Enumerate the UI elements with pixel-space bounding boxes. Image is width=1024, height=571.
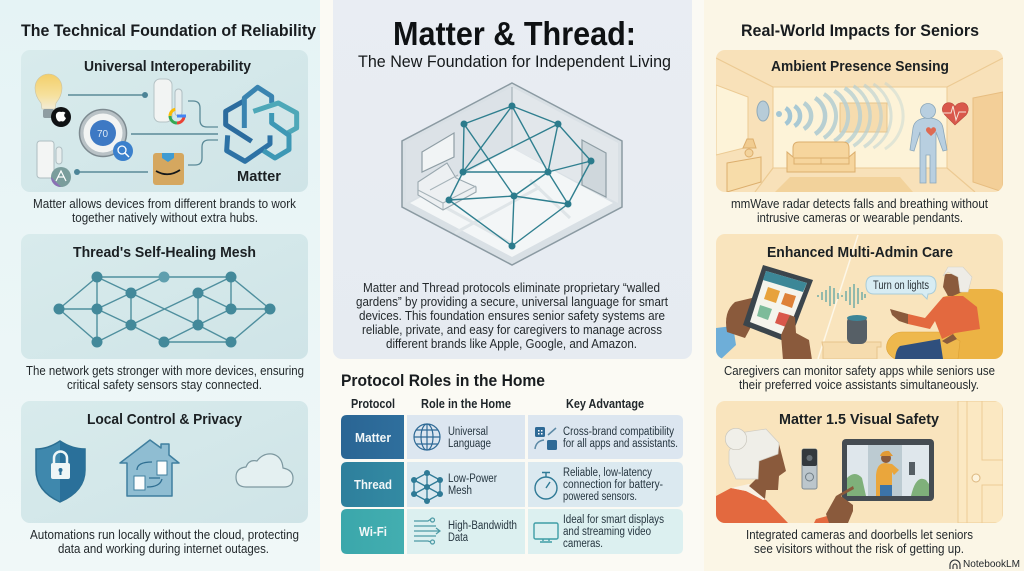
card: universal interoperability: Matter — [237, 168, 281, 185]
icon: house with local data — [120, 440, 179, 496]
row: wi-fi: Data — [448, 532, 468, 544]
row: wi-fi: Ideal for smart displays — [563, 514, 664, 526]
row: matter: Cross-brand compatibility — [563, 426, 674, 438]
row: thread: Mesh — [448, 485, 472, 497]
text: multi-admin caption: Caregivers can monitor safety apps while seniors use — [724, 364, 995, 378]
text: interoperability caption: together natively without extra hubs. — [72, 211, 258, 225]
text: visual safety caption: Integrated cameras and doorbells let seniors — [746, 528, 973, 542]
row: thread: Thread — [354, 477, 392, 492]
card: self-healing mesh: Thread's Self-Healing Mesh — [73, 244, 256, 261]
text: overview paragraph: devices. This foundation ensures senior safety systems are — [359, 309, 665, 323]
text: overview paragraph: different brands like Apple, Google, and Amazon. — [386, 337, 637, 351]
row: matter: Universal — [448, 426, 488, 438]
row: wi-fi: cameras. — [563, 538, 603, 550]
title: Matter & Thread: — [393, 15, 636, 52]
mesh network diagram — [54, 272, 276, 348]
card: universal interoperability — [21, 50, 308, 192]
heading: technical foundation: The Technical Foundation of Reliability — [21, 21, 317, 40]
row: matter — [341, 415, 683, 459]
icon: shield with lock — [36, 441, 85, 502]
icon: display — [534, 523, 558, 542]
card: local control and privacy — [21, 401, 308, 523]
text: interoperability caption: Matter allows devices from different brands to work — [33, 197, 297, 211]
card: local control and privacy: Local Control & Privacy — [87, 411, 243, 428]
text: presence caption: mmWave radar detects falls and breathing without — [731, 197, 988, 211]
row: thread: connection for battery- — [563, 479, 663, 491]
card: visual safety — [716, 401, 1003, 523]
heading: protocol roles: Protocol Roles in the Home — [341, 371, 545, 390]
row: thread: Reliable, low-latency — [563, 467, 652, 479]
notebooklm watermark: NotebookLM — [963, 559, 1020, 570]
subtitle: The New Foundation for Independent Living — [358, 52, 671, 71]
illustration: senior pointing at display — [716, 428, 854, 523]
text: presence caption: intrusive cameras or wearable pendants. — [757, 211, 963, 225]
card: multi-admin care: Enhanced Multi-Admin Care — [767, 244, 953, 261]
text: presence caption — [731, 197, 988, 225]
radar waves — [776, 83, 903, 149]
row: matter: Language — [448, 438, 491, 450]
speech bubble: Turn on lights — [873, 280, 929, 292]
heading: real-world impacts: Real-World Impacts for Seniors — [741, 21, 979, 40]
picture on wall — [840, 103, 887, 132]
icon: sofa — [787, 142, 855, 172]
text: mesh caption: critical safety sensors stay connected. — [67, 378, 262, 392]
icon: low-power mesh — [411, 470, 443, 504]
text: mesh caption — [26, 364, 304, 392]
card: universal interoperability: Universal Interoperability — [84, 58, 252, 75]
icon: radar sensor — [757, 101, 769, 121]
text: privacy caption — [30, 528, 299, 556]
panel: protocol roles table — [341, 371, 683, 554]
icon: globe — [414, 424, 440, 450]
panel: real-world impacts — [716, 21, 1004, 556]
text: overview paragraph: reliable, private, and easy for caregivers to manage across — [362, 323, 662, 337]
text: overview paragraph: Matter and Thread protocols eliminate proprietary “walled — [363, 281, 660, 295]
text: visual safety caption — [746, 528, 973, 556]
icon: thermostat — [80, 110, 133, 161]
icon: cross-brand apps — [535, 427, 557, 450]
icon: video doorbell — [802, 449, 817, 489]
speech bubble — [866, 276, 936, 299]
table header row: Role in the Home — [421, 397, 511, 411]
row: wi-fi: Wi-Fi — [359, 524, 387, 539]
icon: lamp and cabinet — [743, 139, 756, 148]
illustration: caregiver with tablet — [716, 265, 813, 360]
voice waveform — [818, 284, 865, 308]
row: wi-fi: and streaming video — [563, 526, 651, 538]
row: wi-fi: High-Bandwidth — [448, 520, 517, 532]
text: multi-admin caption — [724, 364, 995, 392]
icon: thermostat: 70 — [97, 129, 109, 140]
row: matter: for all apps and assistants. — [563, 438, 678, 450]
icon: data streams — [414, 518, 440, 544]
icon: smart speaker — [822, 315, 881, 359]
icon: amazon box — [153, 153, 184, 185]
isometric room with mesh — [402, 83, 622, 265]
card: self-healing mesh — [21, 234, 308, 359]
table header row: Protocol — [351, 397, 395, 411]
connector lines — [68, 92, 218, 175]
card: visual safety: Matter 1.5 Visual Safety — [779, 411, 940, 428]
row: matter: Matter — [355, 430, 391, 445]
text: privacy caption: Automations run locally without the cloud, protecting — [30, 528, 299, 542]
table header row: Key Advantage — [566, 397, 644, 411]
icon: door sensor with google badge — [154, 79, 186, 123]
table header row — [351, 397, 644, 411]
row: wi-fi — [341, 509, 683, 554]
row: thread — [341, 462, 683, 507]
card: ambient presence sensing — [716, 50, 1003, 192]
panel: technical foundation — [21, 21, 317, 556]
text: visual safety caption: see visitors without the risk of getting up. — [754, 542, 964, 556]
text: interoperability caption — [33, 197, 297, 225]
row: thread: powered sensors. — [563, 491, 637, 503]
illustration: senior in armchair — [887, 267, 1004, 359]
icon: matter logo — [226, 87, 297, 161]
row: thread: Low-Power — [448, 473, 497, 485]
icon: cloud — [236, 454, 293, 487]
smart display — [842, 439, 934, 501]
card: multi-admin care — [716, 234, 1004, 360]
text: mesh caption: The network gets stronger with more devices, ensuring — [26, 364, 304, 378]
icon: person with heart — [910, 118, 947, 183]
text: multi-admin caption: their preferred voice assistants simultaneously. — [739, 378, 979, 392]
icon: stopwatch — [535, 472, 557, 499]
text: overview paragraph: gardens” by providing a secure, universal language for smart — [356, 295, 668, 309]
icon: smart bulb with apple badge — [35, 74, 71, 127]
illustration: door — [958, 401, 1003, 523]
text: overview paragraph — [356, 281, 668, 351]
card: ambient presence sensing: Ambient Presence Sensing — [771, 58, 949, 75]
icon: contact sensor with badge — [37, 141, 71, 187]
text: privacy caption: data and working during internet outages. — [58, 542, 269, 556]
panel: central overview — [333, 0, 692, 359]
